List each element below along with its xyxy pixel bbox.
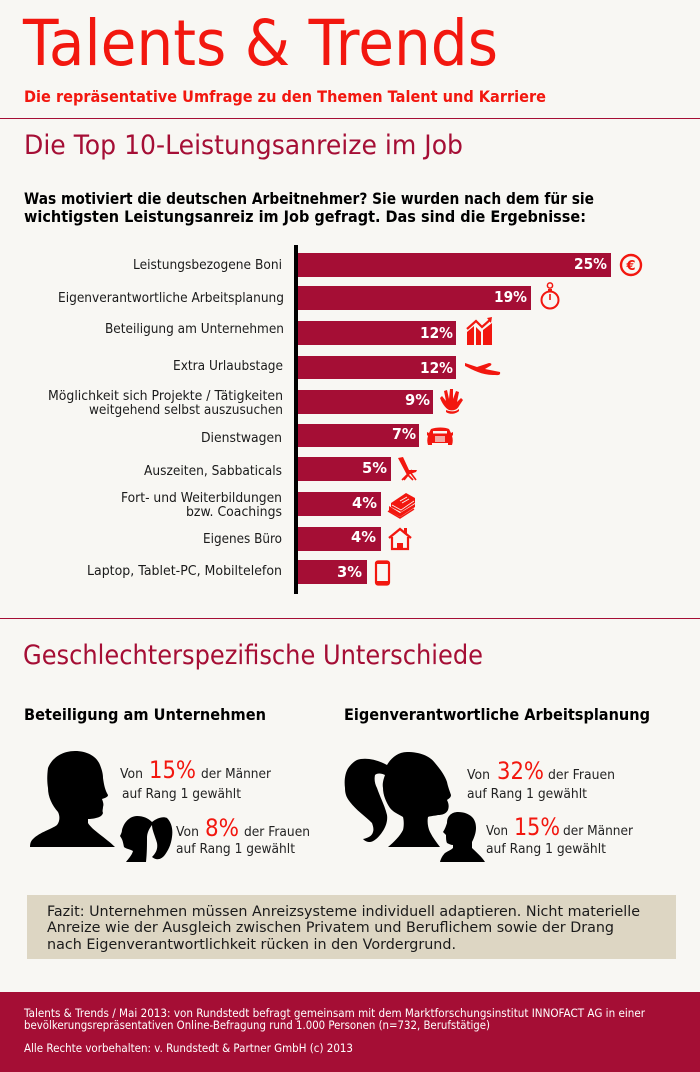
footer: [0, 992, 700, 1072]
row: Beteiligung am Unternehmen: [105, 321, 456, 345]
stat: 8% women: 8%: [205, 814, 239, 842]
row: Dienstwagen: 7%: [392, 425, 416, 443]
stat: 15% men: auf Rang 1 gewählt: [122, 786, 241, 802]
callout: Fazit: Anreize wie der Ausgleich zwischen Privatem und Beruflichem sowie der Drang: [47, 920, 614, 936]
stat: 32% women: [467, 757, 615, 802]
row: Möglichkeit sich Projekte: 9%: [405, 391, 430, 409]
row: Laptop, Tablet-PC, Mobiltelefon: Laptop, Tablet-PC, Mobiltelefon: [87, 563, 282, 579]
stat: 15% men: 15%: [514, 813, 560, 841]
subtitle: Die repräsentative Umfrage zu den Themen Talent und Karriere: [24, 87, 546, 106]
panel heading right: Eigenverantwortliche Arbeitsplanung: [344, 705, 650, 724]
stat: 15% men: auf Rang 1 gewählt: [486, 841, 606, 857]
callout: Fazit: Fazit: Unternehmen müssen Anreizsysteme individuell adaptieren. Nicht materielle: [47, 904, 640, 920]
stat: 8% women: [176, 814, 310, 857]
row: Fort- und Weiterbildungen: 4%: [352, 494, 377, 512]
stat: 32% women: auf Rang 1 gewählt: [467, 786, 587, 802]
footer: Talents & Trends / Mai 2013: von Rundstedt befragt gemeinsam mit dem Marktforschungsinstitut INNOFACT AG in einer: [23, 1006, 645, 1020]
row: Auszeiten, Sabbaticals: [144, 457, 391, 481]
stat: 15% men: der Männer: [201, 766, 271, 782]
row: Möglichkeit sich Projekte: [48, 388, 433, 418]
row: Extra Urlaubstage: 12%: [420, 359, 453, 377]
footer: bevölkerungsrepräsentativen Online-Befragung rund 1.000 Personen (n=732, Berufstätige): [24, 1018, 490, 1032]
row: Beteiligung am Unternehmen: Beteiligung am Unternehmen: [105, 321, 284, 337]
icon: hand: [440, 389, 463, 414]
callout: Fazit: [27, 895, 676, 959]
row: Eigenes Büro: 4%: [351, 528, 376, 546]
intro text: wichtigsten Leistungsanreiz im Job gefragt. Das sind die Ergebnisse:: [24, 207, 586, 226]
row: Extra Urlaubstage: [173, 356, 456, 379]
row: Laptop, Tablet-PC, Mobiltelefon: 3%: [337, 563, 362, 581]
row: Extra Urlaubstage: Extra Urlaubstage: [173, 358, 283, 374]
row: Auszeiten, Sabbaticals: 5%: [362, 459, 387, 477]
title: Talents & Trends: [22, 7, 498, 80]
heading: top 10: Die Top 10-Leistungsanreize im Job: [24, 130, 463, 161]
stat: 15% men: [486, 813, 633, 857]
row: Möglichkeit sich Projekte: weitgehend selbst auszusuchen: [89, 402, 283, 418]
icon: growth chart: [467, 317, 492, 345]
row: Leistungsbezogene Boni: [133, 253, 611, 277]
stat: 15% men: der Männer: [563, 823, 633, 839]
stat: 32% women: 32%: [497, 757, 544, 785]
row: Eigenverantwortliche Arbeitsplanung: [58, 286, 531, 310]
panel: Beteiligung am Unternehmen: [24, 705, 310, 862]
row: Leistungsbezogene Boni: Leistungsbezogene Boni: [133, 257, 282, 273]
icon: house: [389, 528, 411, 549]
stat: 8% women: der Frauen: [244, 824, 310, 840]
icon: stopwatch: [542, 283, 558, 308]
footer: Alle Rechte vorbehalten: v. Rundstedt & Partner GmbH (c) 2013: [24, 1041, 353, 1055]
row: Eigenverantwortliche Arbeitsplanung: Eigenverantwortliche Arbeitsplanung: [58, 290, 284, 306]
intro text: [24, 189, 594, 226]
row: Laptop, Tablet-PC, Mobiltelefon: [87, 560, 367, 584]
intro text: Was motiviert die deutschen Arbeitnehmer? Sie wurden nach dem für sie: [24, 189, 594, 208]
callout: Fazit: nach Eigenverantwortlichkeit rücken in den Vordergrund.: [47, 937, 456, 953]
stat: 8% women: Von: [176, 824, 199, 840]
row: Fort- und Weiterbildungen: bzw. Coachings: [186, 504, 282, 520]
panel heading left: Beteiligung am Unternehmen: [24, 705, 266, 724]
stat: 15% men: [120, 756, 271, 802]
row: Fort- und Weiterbildungen: Fort- und Weiterbildungen: [121, 490, 282, 506]
icon: woman silhouette large: [345, 752, 451, 847]
row: Dienstwagen: Dienstwagen: [201, 430, 282, 446]
stat: 15% men: Von: [120, 766, 143, 782]
row: Eigenes Büro: Eigenes Büro: [203, 531, 282, 547]
row: Möglichkeit sich Projekte: Möglichkeit sich Projekte / Tätigkeiten: [48, 388, 283, 404]
icon: man silhouette: [30, 751, 115, 847]
row: Dienstwagen: [201, 424, 419, 447]
row: Fort- und Weiterbildungen: [121, 490, 381, 520]
icon: phone: [376, 561, 389, 585]
stat: 32% women: der Frauen: [548, 767, 615, 783]
icon: man silhouette small: [440, 812, 485, 862]
row: Auszeiten, Sabbaticals: Auszeiten, Sabbaticals: [144, 463, 282, 479]
stat: 15% men: Von: [486, 823, 508, 839]
stat: 32% women: Von: [467, 767, 490, 783]
bar chart: [48, 245, 641, 594]
heading: gender differences: Geschlechterspezifische Unterschiede: [23, 640, 483, 671]
panel: Eigenverantwortliche Arbeitsplanung: [344, 705, 650, 862]
icon: deck chair: [398, 457, 417, 480]
stat: 15% men: 15%: [149, 756, 196, 784]
icon: books: [388, 493, 415, 518]
row: Leistungsbezogene Boni: 25%: [574, 255, 607, 273]
chart axis: [294, 245, 298, 594]
icon: plane: [465, 363, 500, 375]
row: Beteiligung am Unternehmen: 12%: [420, 324, 453, 342]
icon: woman silhouette small: [120, 816, 172, 862]
stat: 8% women: auf Rang 1 gewählt: [176, 841, 295, 857]
row: Eigenes Büro: [203, 527, 381, 551]
icon: car: [427, 428, 453, 445]
icon: euro: [621, 255, 641, 275]
row: Eigenverantwortliche Arbeitsplanung: 19%: [494, 288, 527, 306]
icon: euro: €: [625, 259, 636, 274]
